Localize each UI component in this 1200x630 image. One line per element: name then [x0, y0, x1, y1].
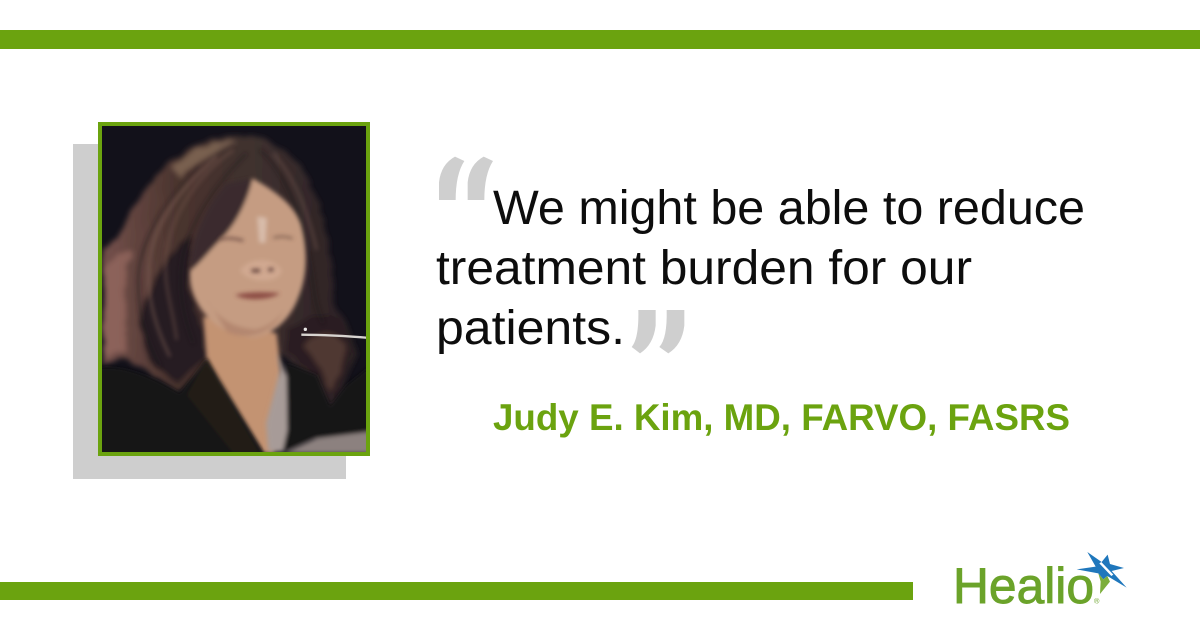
opening quotation mark [439, 156, 493, 200]
hair strands [138, 150, 323, 367]
portrait photo with green frame [98, 122, 370, 456]
quote text: patients. [436, 302, 625, 355]
microphone [301, 335, 370, 338]
quote text: We might be able to reduce [493, 182, 1085, 235]
quote text [436, 182, 1085, 355]
bottom green bar [0, 582, 913, 600]
top green bar [0, 30, 1200, 49]
attribution name: Judy E. Kim, MD, FARVO, FASRS [493, 397, 1070, 438]
Healio logo: ® [1094, 596, 1100, 605]
photo shadow panel [73, 144, 346, 479]
jacket [98, 352, 370, 456]
closing quotation mark [632, 310, 684, 354]
neck [203, 317, 287, 453]
quote text: treatment burden for our [436, 242, 972, 295]
